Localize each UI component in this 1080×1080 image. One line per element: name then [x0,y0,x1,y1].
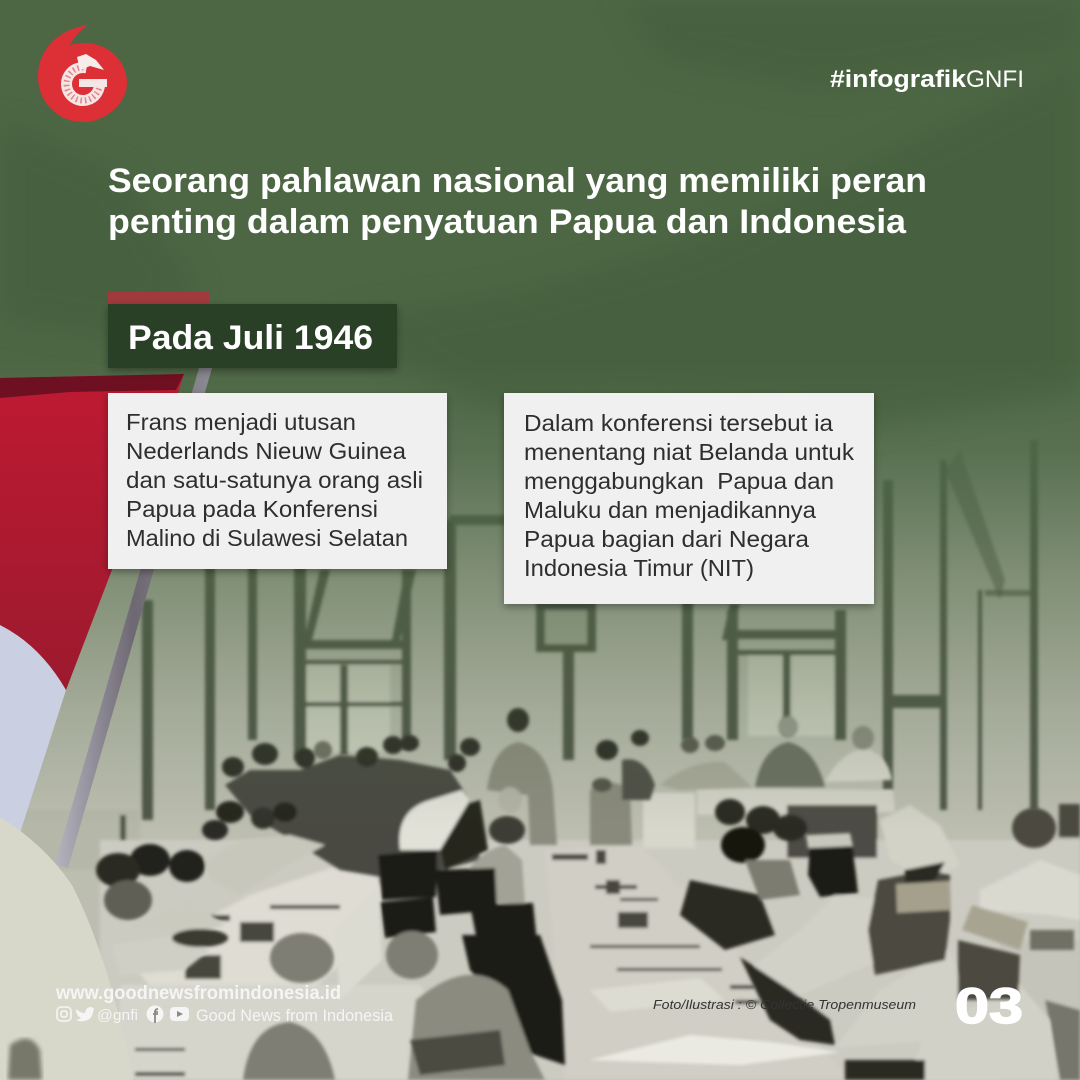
text box: left [108,393,447,569]
text box: left: Papua pada Konferensi [126,496,378,522]
icon: facebook [146,1006,164,1023]
middle dark crowd [433,800,488,870]
photo: green gradient overlay [0,360,1080,830]
back row bodies [225,755,480,880]
title: penting dalam penyatuan Papua dan Indonesia [108,203,907,241]
photo: conference room [0,360,1080,1080]
heading: Pada Juli 1946: Pada Juli 1946 [128,319,373,357]
text box: right: Papua bagian dari Negara [524,526,809,552]
right delegates: white garments [755,860,1080,1080]
photo: seated delegates [96,708,1080,1080]
flag pole [55,368,212,868]
back row heads [222,708,874,792]
footer: website and social: www.goodnewsfromindonesia.id [55,983,341,1004]
page number: 03 [955,978,1023,1034]
text box: left: Frans menjadi utusan [126,409,356,435]
photo credit: Foto/Ilustrasi : © Collectie Tropenmuseum [653,997,916,1012]
text box: right: menentang niat Belanda untuk [524,439,855,465]
text box: left: Malino di Sulawesi Selatan [126,525,408,551]
photo: window frames and posts [0,440,1038,875]
heading: Pada Juli 1946 [108,292,397,368]
footer: website and social [55,983,394,1025]
text box: left: dan satu-satunya orang asli [126,467,423,493]
logo: GNFI [38,25,127,122]
footer: website and social: @gnfi [97,1007,138,1024]
title: Seorang pahlawan nasional yang memiliki peran [108,162,927,200]
fezzes centre [378,850,565,1065]
photo: white-clad figure at lower left [0,817,133,1080]
second row left [216,801,244,823]
text box: right: menggabungkan Papua dan [524,468,834,494]
photo: wall [0,360,1080,1080]
background: faint world map [0,0,1080,430]
hashtag: #infografik GNFI [830,66,1024,93]
icon: Indonesian flag [0,368,212,868]
right table side: dark hair [680,799,858,950]
text box: right: Dalam konferensi tersebut ia [524,410,833,436]
grey backs of heads in front [243,931,545,1080]
icon: instagram [57,1007,71,1021]
title [108,162,927,241]
icon: twitter [76,1007,94,1021]
text box: left: Nederlands Nieuw Guinea [126,438,406,464]
front row left [130,844,170,876]
icon: youtube [170,1007,189,1021]
flag red stripe [0,374,184,690]
text box: right: Indonesia Timur (NIT) [524,555,754,581]
photo: floor and tables [100,788,1080,1080]
text box: right: Maluku dan menjadikannya [524,497,816,523]
footer: website and social: Good News from Indonesia [196,1006,394,1025]
text box: right [504,393,874,604]
flag white stripe [0,625,66,833]
